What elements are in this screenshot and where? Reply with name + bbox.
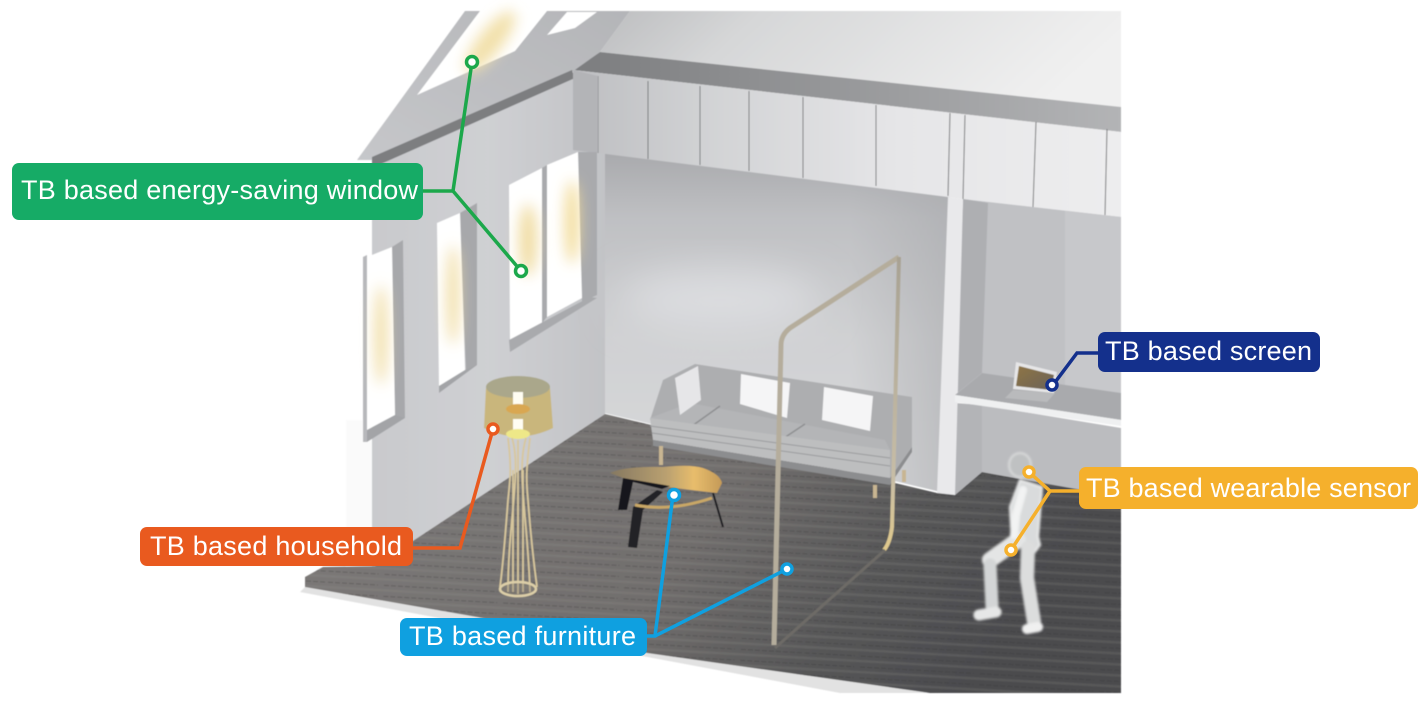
left wall <box>372 78 605 566</box>
desk <box>955 373 1121 426</box>
connector: household <box>413 429 493 548</box>
callout: furniture <box>400 490 792 656</box>
coffee table <box>610 466 723 548</box>
connector: wearable sensor <box>1011 472 1079 550</box>
callout: screen <box>1047 332 1320 390</box>
glass partition <box>774 257 899 648</box>
callout: furniture: TB based furniture <box>409 621 636 651</box>
callout: household: TB based household <box>150 531 402 561</box>
window 3 <box>509 152 597 352</box>
connector: window <box>423 62 521 271</box>
sofa <box>650 364 912 498</box>
connector: furniture <box>647 495 787 636</box>
cabinets <box>573 70 1121 217</box>
alcove back <box>955 199 1121 497</box>
callout: energy-saving window <box>12 56 526 276</box>
back wall <box>600 150 950 492</box>
callout: screen: TB based screen <box>1105 336 1312 366</box>
callout: wearable sensor <box>1006 467 1418 555</box>
wall light <box>620 270 820 330</box>
back wall shade <box>850 180 950 492</box>
window 2 <box>437 203 477 393</box>
illustration: house cross-section <box>300 5 1121 693</box>
floor <box>300 414 1121 693</box>
window 1 <box>363 240 405 442</box>
person figure <box>979 453 1042 629</box>
pillar <box>937 197 963 495</box>
ceiling and roof <box>357 11 1121 168</box>
roof skylights <box>417 5 597 95</box>
callout: energy-saving window: TB based energy-saving window <box>21 175 418 205</box>
floor lamp <box>484 376 553 596</box>
connector: screen <box>1053 353 1098 385</box>
laptop <box>1005 362 1057 402</box>
callout: household <box>140 424 498 566</box>
corner column fade <box>346 420 373 570</box>
callout: wearable sensor: TB based wearable sensor <box>1086 473 1411 503</box>
